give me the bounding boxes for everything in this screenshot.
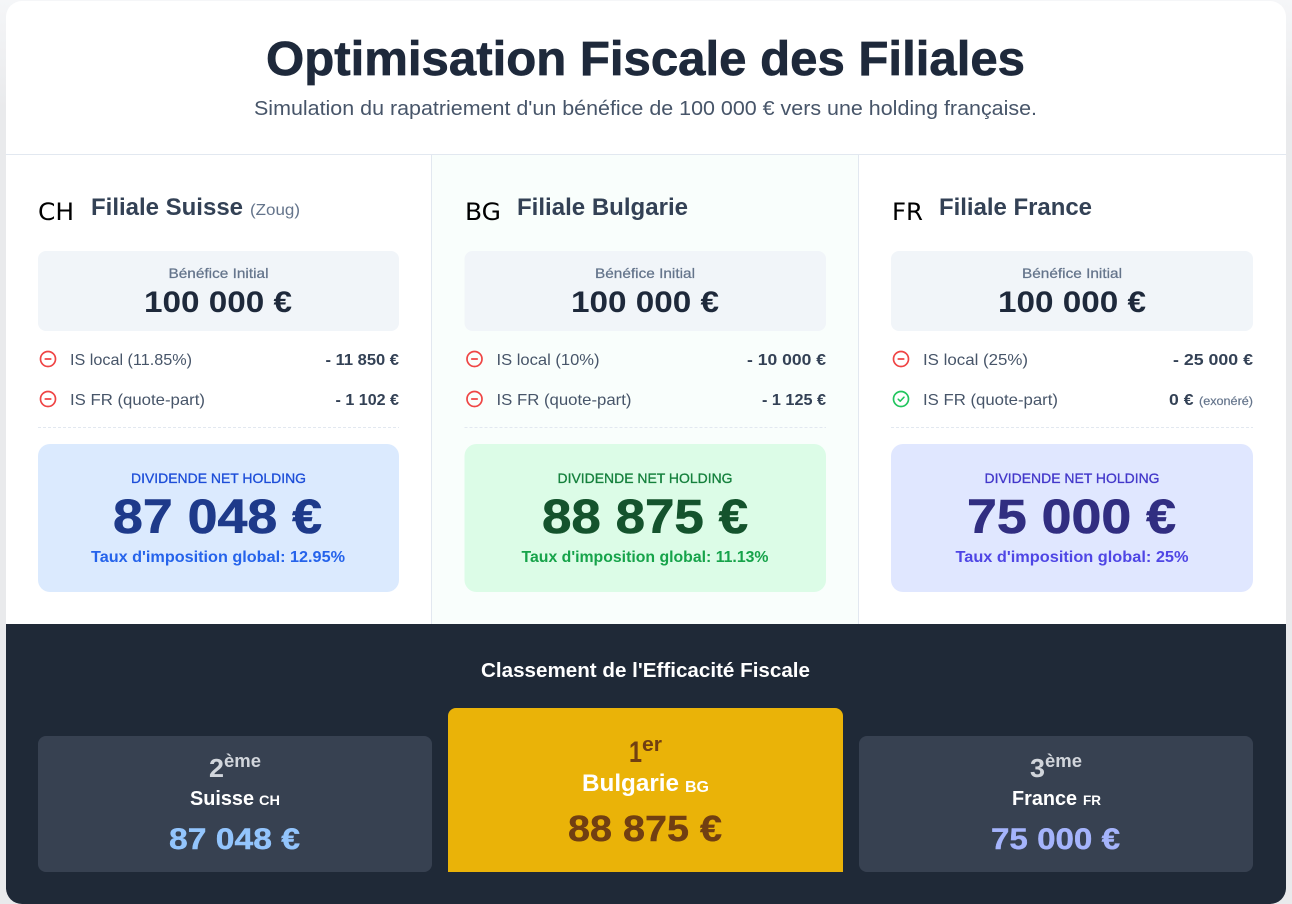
initial profit box: 100 000 € — [144, 286, 292, 319]
subtitle: Simulation du rapatriement d'un bénéfice de 100 000 € vers une holding française. — [254, 98, 1037, 120]
rank card: Suisse — [38, 736, 432, 872]
row: IS local: - 11 850 € — [326, 352, 399, 369]
net dividend box: 88 875 € — [542, 491, 748, 544]
row: IS FR: - 1 102 € — [336, 392, 399, 409]
row: IS local: IS local (25%) — [923, 352, 1028, 369]
rank card: France: 3 — [1030, 753, 1045, 783]
location Zoug: (Zoug) — [250, 202, 300, 219]
net dividend box: Taux d'imposition global: 11.13% — [522, 549, 768, 566]
panel: Suisse — [38, 194, 399, 592]
rank card: Suisse: Suisse — [190, 788, 254, 810]
row: IS local: - 10 000 € — [747, 352, 826, 369]
initial profit box: 100 000 € — [571, 286, 719, 319]
row: IS FR exempt: IS FR (quote-part) — [923, 392, 1058, 409]
panel: France — [891, 194, 1253, 592]
rank card: Bulgarie: er — [642, 734, 662, 756]
net dividend box: Taux d'imposition global: 12.95% — [91, 549, 345, 566]
row: IS FR exempt: 0 € — [1169, 392, 1194, 409]
flag code CH: CH — [38, 198, 74, 226]
initial profit box: Bénéfice Initial — [595, 265, 695, 281]
rank card: France: ème — [1045, 751, 1082, 771]
net dividend box: Taux d'imposition global: 25% — [956, 549, 1188, 566]
row: IS FR: IS FR (quote-part) — [70, 392, 205, 409]
flag code BG: BG — [465, 198, 501, 226]
rank card: France: FR — [1083, 792, 1101, 808]
rank card: Suisse: 2 — [209, 753, 224, 783]
row: IS local — [40, 352, 399, 369]
flag code FR: FR — [892, 198, 923, 226]
rank card: Suisse: ème — [224, 751, 261, 771]
row: IS local: IS local (10%) — [496, 352, 600, 369]
heading France: Filiale France — [939, 194, 1092, 221]
net dividend box: DIVIDENDE NET HOLDING — [558, 470, 732, 486]
initial profit box: Bénéfice Initial — [168, 265, 268, 281]
rank card: Bulgarie: 88 875 € — [568, 808, 722, 849]
rank card: France: France — [1012, 788, 1077, 810]
net dividend box: DIVIDENDE NET HOLDING — [131, 470, 306, 486]
ranking heading: Classement de l'Efficacité Fiscale — [481, 660, 810, 682]
row: IS FR — [467, 392, 826, 409]
panel: ranking — [6, 624, 1286, 904]
row: IS FR exempt — [894, 392, 1253, 409]
net dividend box: 87 048 € — [113, 491, 322, 544]
rank card: Bulgarie — [448, 708, 843, 872]
net dividend box — [891, 444, 1253, 592]
row: IS local: - 25 000 € — [1173, 352, 1253, 369]
initial profit box: Bénéfice Initial — [1022, 265, 1122, 281]
heading Suisse: Filiale Suisse — [91, 194, 243, 221]
title: Optimisation Fiscale des Filiales — [266, 33, 1025, 86]
net dividend box: 75 000 € — [967, 491, 1176, 544]
row: IS FR: - 1 125 € — [762, 392, 826, 409]
initial profit box: 100 000 € — [998, 286, 1146, 319]
row: IS FR — [40, 392, 399, 409]
rank card: Bulgarie: Bulgarie — [582, 770, 679, 797]
net dividend box — [38, 444, 399, 592]
net dividend box — [464, 444, 826, 592]
rank card: Suisse: 87 048 € — [169, 823, 300, 856]
rank card: France — [859, 736, 1253, 872]
rank card: Bulgarie: 1 — [629, 736, 642, 769]
initial profit box — [464, 251, 826, 331]
row: IS local: IS local (11.85%) — [70, 352, 192, 369]
panel: Bulgarie — [464, 194, 826, 592]
row: IS FR exempt: (exonéré) — [1199, 394, 1253, 408]
row: IS local — [894, 352, 1253, 369]
rank card: France: 75 000 € — [991, 823, 1120, 856]
initial profit box — [38, 251, 399, 331]
row: IS FR: IS FR (quote-part) — [496, 392, 632, 409]
initial profit box — [891, 251, 1253, 331]
row: IS local — [467, 352, 826, 369]
heading Bulgarie: Filiale Bulgarie — [517, 194, 688, 221]
rank card: Bulgarie: BG — [685, 779, 709, 796]
net dividend box: DIVIDENDE NET HOLDING — [984, 470, 1160, 486]
rank card: Suisse: CH — [259, 792, 280, 808]
